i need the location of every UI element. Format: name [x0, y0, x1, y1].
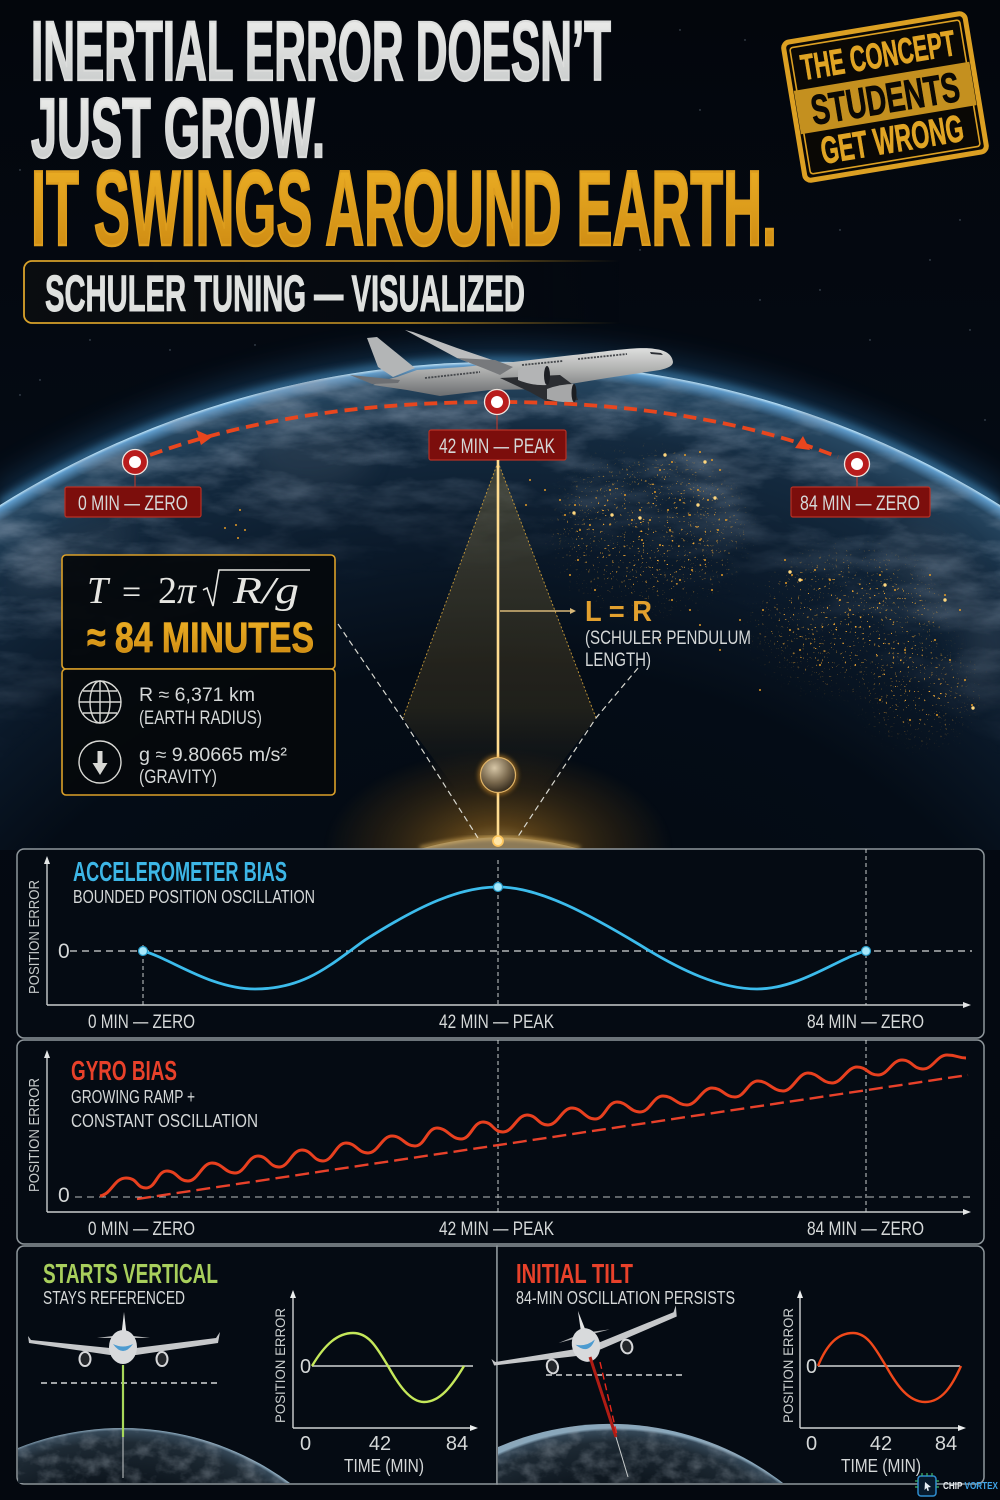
panel: gyro bias: 0 MIN — ZERO: [88, 1219, 195, 1240]
marker: 0 min zero: [65, 450, 201, 517]
title: JUST GROW.: [31, 81, 325, 175]
panel: accelerometer bias: BOUNDED POSITION OSCILLATION: [73, 887, 315, 907]
label: L = R: (SCHULER PENDULUM: [585, 628, 751, 649]
panel: gyro bias: 42 MIN — PEAK: [439, 1219, 554, 1240]
panel: starts vertical: STAYS REFERENCED: [43, 1288, 185, 1308]
mini chart: 84: [935, 1433, 957, 1455]
constants box: (EARTH RADIUS): [139, 708, 262, 729]
subtitle box: [24, 261, 620, 323]
formula box: =: [122, 574, 141, 611]
title: [31, 4, 777, 268]
panel: initial tilt: [485, 1246, 984, 1484]
panel: accelerometer bias: 0: [58, 940, 70, 963]
constants box: g ≈ 9.80665 m/s²: [139, 745, 287, 766]
label: L = R: LENGTH): [585, 650, 651, 671]
airplane front view: [28, 1312, 220, 1366]
badge: the concept students get wrong: [783, 13, 987, 181]
panel: gyro bias: GROWING RAMP +: [71, 1087, 195, 1107]
chart curve: [143, 887, 866, 989]
label: L = R: [500, 596, 751, 671]
mini chart: 0: [300, 1433, 311, 1455]
marker: 84 min zero: [791, 452, 930, 517]
panel: starts vertical: [17, 1246, 497, 1484]
panel: gyro bias: 84 MIN — ZERO: [807, 1219, 924, 1240]
constants box: (GRAVITY): [139, 767, 217, 788]
airplane tilted: [485, 1286, 685, 1388]
marker: 42 min peak: [429, 390, 566, 460]
label: L = R: L = R: [585, 596, 652, 628]
panel: gyro bias: [17, 1040, 984, 1244]
mini chart: [780, 1290, 966, 1476]
formula box: R/g: [232, 570, 299, 612]
panel: accelerometer bias: POSITION ERROR: [26, 880, 43, 994]
panel: accelerometer bias: 0 MIN — ZERO: [88, 1012, 195, 1033]
mini chart: [272, 1290, 478, 1476]
logo: chip vortex: [915, 1473, 998, 1496]
formula box: 2π: [158, 570, 197, 612]
mini chart: POSITION ERROR: [272, 1308, 288, 1423]
mini chart: 84: [446, 1433, 468, 1455]
formula box: T: [87, 570, 111, 612]
formula box: [62, 555, 335, 669]
mini chart: 0: [806, 1356, 817, 1378]
oscillating error curve: [100, 1055, 966, 1196]
panel: accelerometer bias: 84 MIN — ZERO: [807, 1012, 924, 1033]
mini chart: 42: [369, 1433, 391, 1455]
panel: gyro bias: POSITION ERROR: [26, 1078, 43, 1192]
heading: ACCELEROMETER BIAS: [73, 856, 287, 887]
heading: INITIAL TILT: [516, 1258, 633, 1289]
mini earth: [498, 1424, 783, 1483]
earth globe with city lights: [0, 362, 1000, 850]
panel: gyro bias: 0: [58, 1184, 70, 1207]
mini chart: 0: [806, 1433, 817, 1455]
airplane: [350, 330, 673, 402]
panel: accelerometer bias: [17, 849, 984, 1038]
pendulum with cone, rod and bob: [323, 460, 673, 949]
constants box: R ≈ 6,371 km: [139, 685, 255, 706]
constants box: [62, 669, 335, 795]
mini earth: [18, 1428, 290, 1483]
panel: gyro bias: CONSTANT OSCILLATION: [71, 1111, 258, 1131]
subtitle box: SCHULER TUNING — VISUALIZED: [45, 265, 525, 322]
heading: STARTS VERTICAL: [43, 1258, 218, 1289]
marker: 0 min zero: 0 MIN — ZERO: [78, 492, 188, 515]
mini chart: TIME (MIN): [344, 1456, 424, 1476]
heading: GYRO BIAS: [71, 1055, 177, 1086]
panel: initial tilt: 84-MIN OSCILLATION PERSISTS: [516, 1288, 735, 1308]
ramp line: [137, 1075, 968, 1199]
marker: 42 min peak: 42 MIN — PEAK: [439, 435, 555, 458]
mini chart: TIME (MIN): [841, 1456, 921, 1476]
formula box: ≈ 84 MINUTES: [87, 614, 314, 662]
mini chart: 0: [300, 1356, 311, 1378]
icon: globe: [79, 681, 121, 723]
marker: 84 min zero: 84 MIN — ZERO: [800, 492, 920, 515]
mini chart: 42: [870, 1433, 892, 1455]
icon: gravity arrow: [79, 741, 121, 783]
mini chart: POSITION ERROR: [780, 1308, 796, 1423]
panel: accelerometer bias: 42 MIN — PEAK: [439, 1012, 554, 1033]
trajectory arc with arrows: [150, 402, 838, 457]
